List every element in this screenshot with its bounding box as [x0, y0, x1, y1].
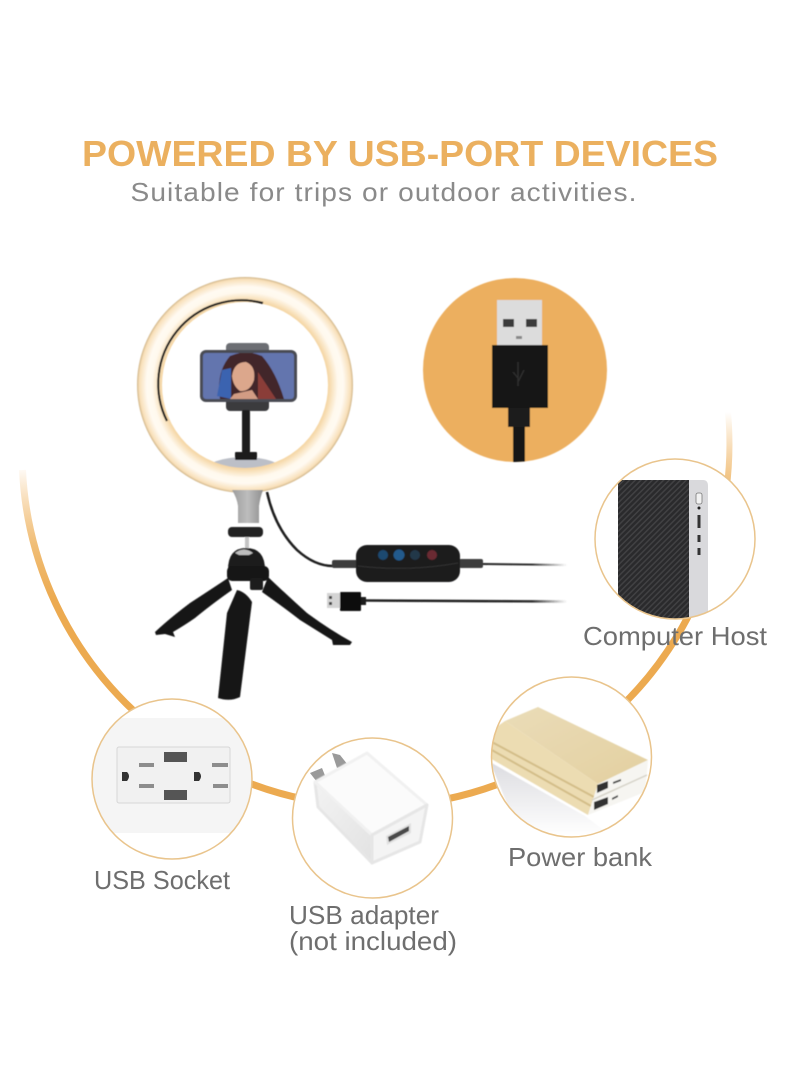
support plate [205, 457, 283, 485]
phone holder [200, 343, 297, 460]
usb plug circle [423, 278, 607, 467]
stem and knob [227, 490, 269, 590]
portrait on phone [217, 352, 284, 399]
tripod legs [155, 577, 352, 700]
plug metal [497, 300, 542, 346]
computer host circle [595, 459, 755, 625]
power bank circle [488, 677, 652, 837]
usb socket circle [90, 699, 255, 859]
usb adapter circle [292, 738, 452, 898]
adapter body [315, 753, 427, 863]
cable from ring [267, 492, 333, 566]
label: usb socket: USB Socket [94, 865, 231, 895]
plug body [492, 345, 548, 408]
usb plug and cable [327, 592, 567, 611]
label: usb adapter: USB adapter [289, 900, 439, 930]
ring lamp [150, 290, 340, 480]
label: computer host: Computer Host [583, 621, 768, 651]
label: usb adapter: (not included) [289, 926, 457, 956]
inline controller [332, 545, 567, 582]
ring light with tripod [150, 290, 567, 700]
label: usb adapter [289, 900, 457, 956]
label: power bank: Power bank [508, 842, 653, 872]
subtitle: Suitable for trips or outdoor activities. [130, 177, 638, 207]
connecting arc [22, 412, 729, 806]
title: POWERED BY USB-PORT DEVICES [82, 133, 718, 174]
prongs [310, 768, 326, 782]
